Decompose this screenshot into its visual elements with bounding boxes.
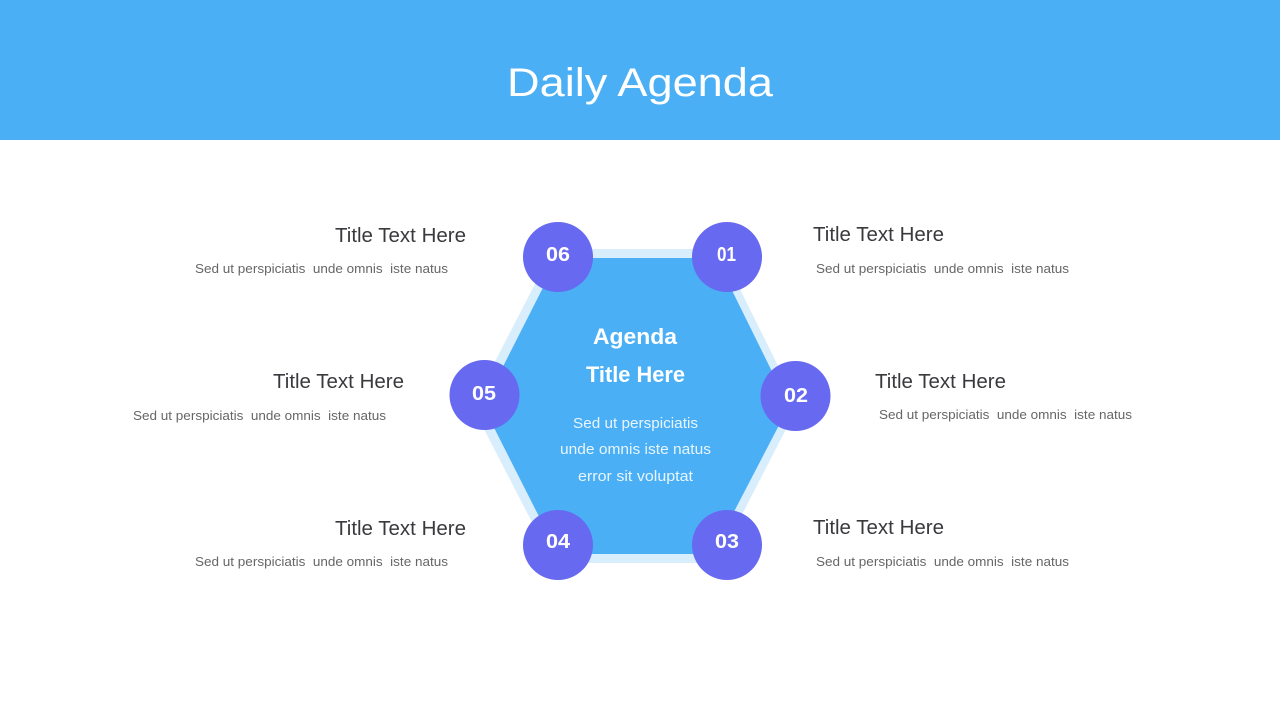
item 02 text: Sed ut perspiciatis unde omnis iste natus — [879, 407, 1133, 422]
item 02 text: Title Text Here — [875, 371, 1006, 393]
center text — [560, 415, 711, 485]
item 05 text — [133, 371, 404, 423]
badge 06 — [523, 222, 593, 292]
center text: unde omnis iste natus — [560, 441, 711, 458]
badge 03 — [692, 510, 762, 580]
title: Daily Agenda — [507, 61, 774, 105]
item 06 text — [195, 225, 466, 276]
badge 05: 05 — [472, 383, 496, 405]
item 04 text: Sed ut perspiciatis unde omnis iste natus — [195, 554, 449, 569]
item 04 text: Title Text Here — [335, 518, 466, 540]
badge 01: 01 — [717, 244, 736, 266]
center heading: Agenda — [593, 324, 678, 349]
item 01 text: Sed ut perspiciatis unde omnis iste natus — [816, 261, 1070, 276]
item 03 text: Sed ut perspiciatis unde omnis iste natus — [816, 554, 1070, 569]
center text: error sit voluptat — [578, 468, 694, 485]
item 03 text — [813, 517, 1070, 569]
badge 02: 02 — [784, 385, 808, 407]
badge 03: 03 — [715, 531, 739, 553]
badge 04: 04 — [546, 531, 571, 553]
badge 04 — [523, 510, 593, 580]
badge 02 — [760, 361, 830, 431]
item 01 text: Title Text Here — [813, 224, 944, 246]
badge 01 — [692, 222, 762, 292]
item 05 text: Sed ut perspiciatis unde omnis iste natus — [133, 408, 387, 423]
item 03 text: Title Text Here — [813, 517, 944, 539]
item 06 text: Sed ut perspiciatis unde omnis iste natus — [195, 261, 449, 276]
item 05 text: Title Text Here — [273, 371, 404, 393]
badge 05 — [450, 360, 520, 430]
item 06 text: Title Text Here — [335, 225, 466, 247]
badge 06: 06 — [546, 244, 570, 266]
item 01 text — [813, 224, 1070, 276]
center text: Sed ut perspiciatis — [573, 415, 698, 432]
center heading — [586, 324, 685, 387]
header band — [0, 0, 1280, 140]
center heading: Title Here — [586, 362, 685, 387]
item 04 text — [195, 518, 466, 569]
item 02 text — [875, 371, 1133, 422]
hexagon — [472, 249, 798, 563]
